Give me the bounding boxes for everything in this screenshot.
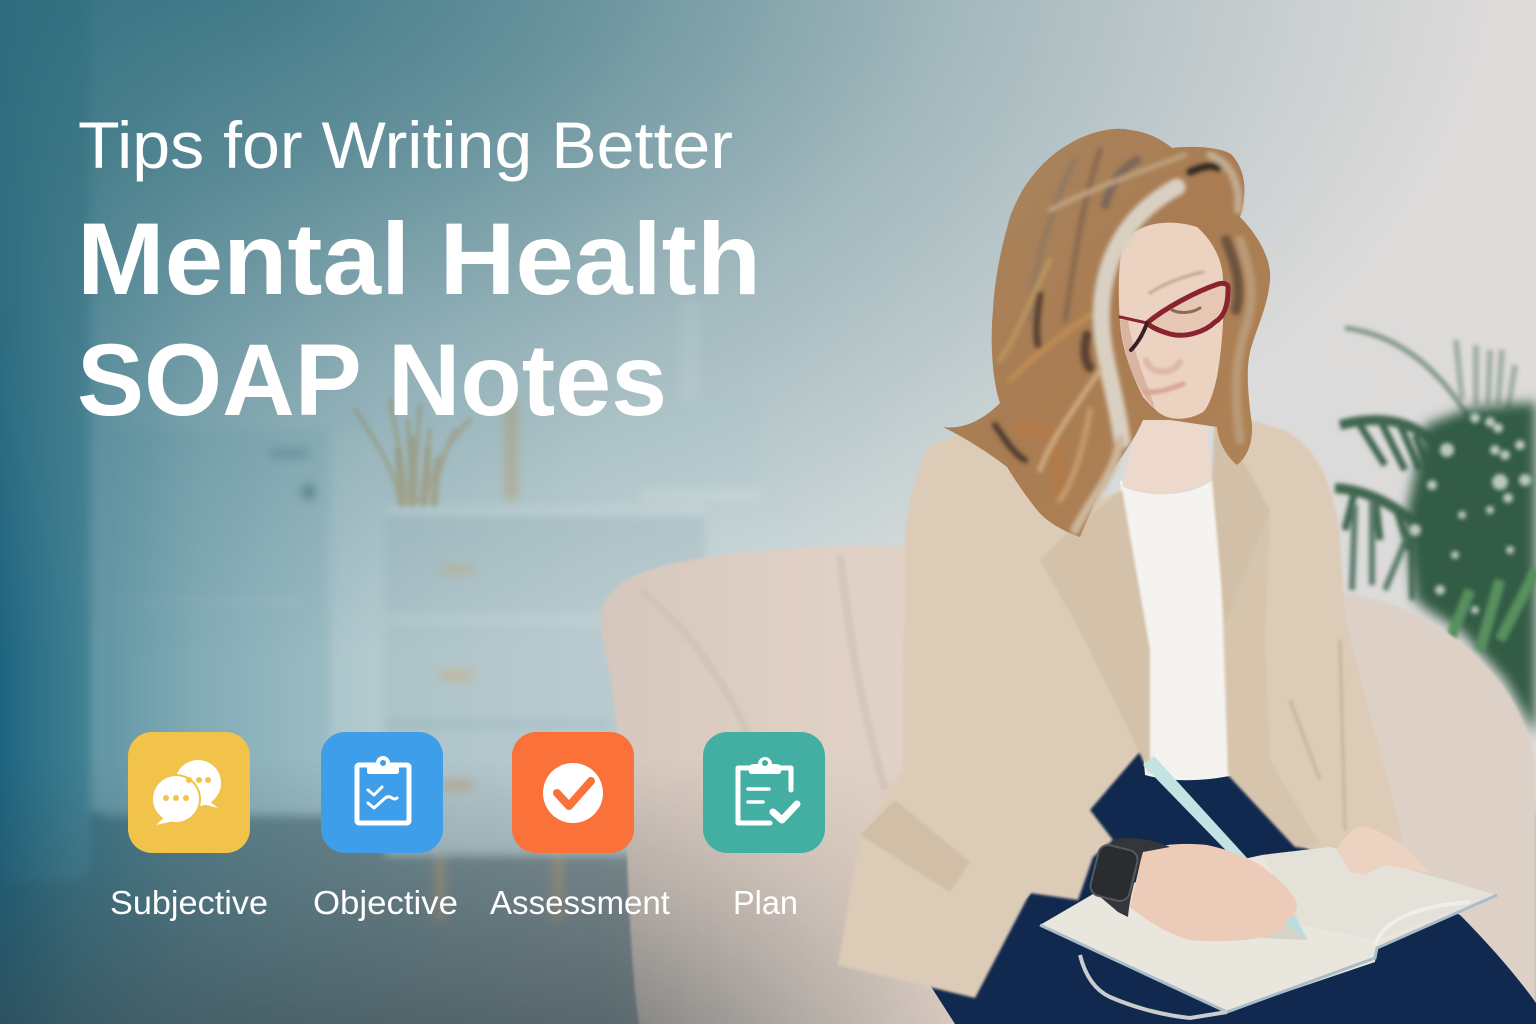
label: Subjective: Subjective xyxy=(110,884,268,921)
face xyxy=(1119,223,1224,419)
label: Objective: Objective xyxy=(313,884,458,921)
hair xyxy=(943,129,1270,537)
pen tip xyxy=(1285,915,1308,941)
title xyxy=(77,108,761,437)
neck xyxy=(1122,400,1212,494)
woman xyxy=(838,129,1536,1024)
pen shaft xyxy=(1143,756,1258,870)
open notebook xyxy=(1040,847,1497,1018)
glasses xyxy=(1120,283,1228,350)
watch xyxy=(1088,838,1170,917)
white top xyxy=(1120,478,1235,780)
icon: Plan clipboard with check xyxy=(703,732,825,853)
dried stems in vase xyxy=(355,400,470,503)
armchair xyxy=(600,546,1536,1024)
label: Assessment: Assessment xyxy=(490,884,670,921)
writing hand xyxy=(1130,844,1297,941)
label: Plan: Plan xyxy=(733,884,798,921)
icon: Assessment check circle xyxy=(512,732,634,853)
hair strands and highlights xyxy=(995,150,1251,530)
title line: SOAP Notes: SOAP Notes xyxy=(77,323,667,437)
title line: Mental Health: Mental Health xyxy=(77,202,761,316)
nose and lips xyxy=(1145,272,1203,392)
plant xyxy=(1335,328,1536,735)
title line: Tips for Writing Better: Tips for Writing Better xyxy=(78,108,733,182)
beige blazer xyxy=(838,410,1403,998)
navy trousers xyxy=(930,738,1536,1024)
icon: Objective clipboard xyxy=(321,732,443,853)
other hand xyxy=(1337,826,1430,875)
icon: Subjective speech bubbles xyxy=(128,732,250,853)
floor and chair bottom shading xyxy=(0,787,954,1024)
